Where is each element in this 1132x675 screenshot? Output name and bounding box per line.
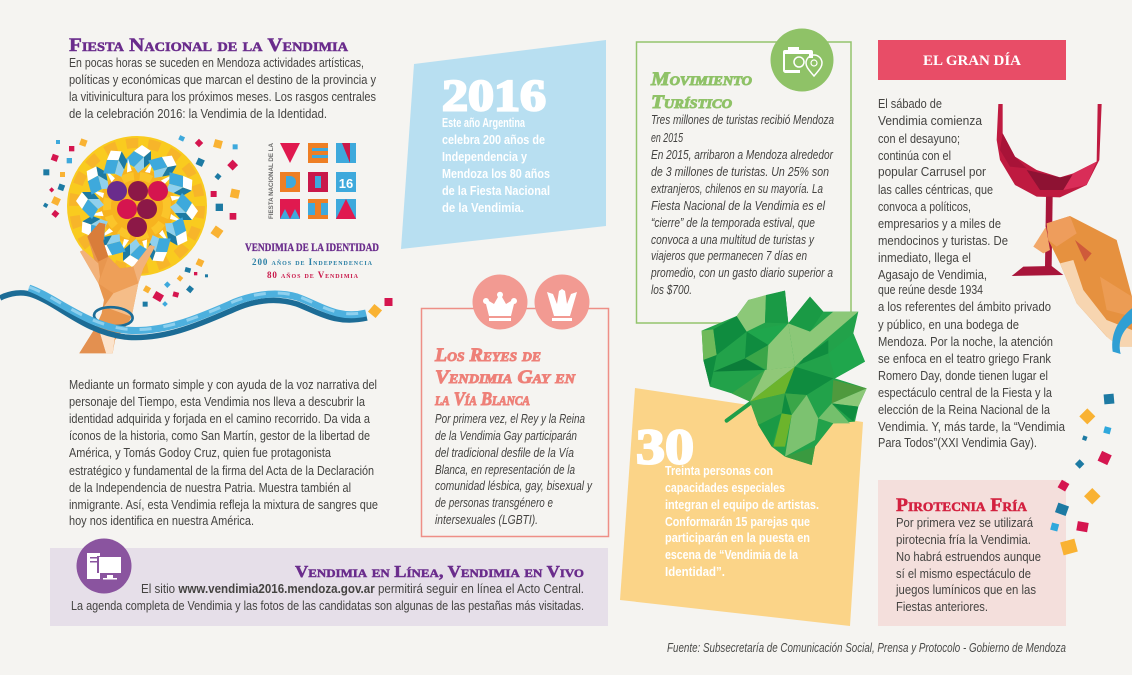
text: 30 body: Conformarán 15 parejas que bbox=[665, 515, 810, 529]
panel: Pirotecnia Fría bbox=[878, 480, 1066, 626]
panel: Los Reyes bbox=[422, 274, 608, 536]
text: Movimiento body: “cierre” de la temporada estival, que bbox=[651, 216, 815, 230]
logo caption: 200 años de Independencia bbox=[252, 257, 373, 267]
text: Los Reyes body bbox=[435, 412, 593, 527]
text: 30 body: Identidad”. bbox=[665, 565, 725, 579]
panel: Movimiento Turístico bbox=[636, 28, 851, 323]
icon: wine glass bbox=[997, 104, 1102, 276]
text: Pirotecnia body: pirotecnia fría la Vendimia. bbox=[896, 533, 1031, 547]
number: 2016: 2016 bbox=[442, 71, 546, 120]
text: Vendimia en Línea body: La agenda completa de Vendimia y las fotos de las candidatas son algunas de las pestañas más visitadas. bbox=[71, 599, 584, 613]
text: Movimiento body: en 2015 bbox=[651, 131, 683, 145]
text block: El Gran Día body bbox=[878, 97, 1065, 450]
text block: El Gran Día body: popular Carrusel por bbox=[878, 165, 986, 179]
text: 2016 body: Este año Argentina bbox=[442, 116, 526, 130]
heading: Movimiento Turístico: Movimiento bbox=[650, 69, 753, 90]
heading: Fiesta Nacional de la Vendimia: Fiesta Nacional de la Vendimia bbox=[69, 35, 349, 56]
text: Los Reyes body: de la Vendimia Gay participarán bbox=[435, 429, 577, 443]
text block: intro: En pocas horas se suceden en Mendoza actividades artísticas, bbox=[69, 56, 364, 70]
text block: El Gran Día body: El sábado de bbox=[878, 97, 942, 111]
text block: Mediante un formato bbox=[69, 378, 378, 528]
illustration: green leaf bbox=[702, 291, 867, 465]
text: 2016 body: de la Vendimia. bbox=[442, 201, 524, 215]
icon: hand holding mandala bbox=[79, 223, 155, 353]
text block: El Gran Día body: mendocinos y turistas. De bbox=[878, 234, 1008, 248]
text: Los Reyes body: del tradicional desfile de la Vía bbox=[435, 446, 574, 460]
text block: El Gran Día body: espectáculo central de la Fiesta y la bbox=[878, 386, 1052, 400]
text block: Mediante un formato: inmigrante. Así, esta Vendimia refleja la mixtura de sangres que bbox=[69, 498, 378, 512]
text block: El Gran Día body: Vendimia. Y, más tarde, la “Vendimia bbox=[878, 420, 1065, 434]
text: Movimiento body: promedio, con un gasto diario superior a bbox=[650, 266, 833, 280]
text block: intro: de la celebración 2016: la Vendimia de la Identidad. bbox=[69, 107, 327, 121]
text: 2016 body: de la Fiesta Nacional bbox=[442, 184, 550, 198]
text block: intro: políticas y económicas que marcan el destino de la provincia y bbox=[69, 73, 377, 87]
text block: El Gran Día body: inmediato, llega el bbox=[878, 251, 971, 265]
text: 30 body bbox=[665, 464, 819, 579]
text block: El Gran Día body: continúa con el bbox=[878, 149, 951, 163]
heading: Pirotecnia Fría: Pirotecnia Fría bbox=[896, 495, 1028, 516]
text block: El Gran Día body: con el desayuno; bbox=[878, 132, 960, 146]
text: Movimiento body: Fiesta Nacional de la Vendimia es el bbox=[651, 199, 826, 213]
text: 30 body: escena de “Vendimia de la bbox=[665, 548, 799, 562]
text: Movimiento body: convoca a una multitud de turistas y bbox=[651, 233, 815, 247]
panel: 30 bbox=[620, 388, 863, 626]
heading: Vendimia en Línea, Vendimia en Vivo: Vendimia en Línea, Vendimia en Vivo bbox=[295, 562, 584, 581]
text block: El Gran Día body: y público, en una bodega de bbox=[878, 318, 1019, 332]
text: 30 body: capacidades especiales bbox=[665, 481, 785, 495]
text: 2016 body: Mendoza los 80 años bbox=[442, 167, 550, 181]
text: 2016 body bbox=[442, 116, 550, 215]
text: Los Reyes body: intersexuales (LGBTI). bbox=[435, 513, 538, 527]
text block: Mediante un formato: identidad adquirida y forjada en el camino recorrido. Da vida a bbox=[69, 412, 370, 426]
heading: Los Reyes de Vendimia Gay en la Vía Blanca: Los Reyes de bbox=[434, 345, 541, 366]
text: Movimiento body: viajeros que permanecen 7 días en bbox=[651, 249, 807, 263]
icon: camera with location pin bbox=[770, 28, 834, 92]
icon: queen crown bbox=[534, 274, 590, 330]
text block: intro bbox=[69, 56, 377, 121]
heading: Movimiento Turístico: Turístico bbox=[651, 92, 733, 113]
text block: El Gran Día body: empresarios y a miles de bbox=[878, 217, 1001, 231]
logo caption: 80 años de Vendimia bbox=[267, 270, 359, 280]
text block: Mediante un formato: América, y Tomás Godoy Cruz, quien fue protagonista bbox=[69, 446, 331, 460]
illustration: Vendimia logo with hand, mandala and ribbon bbox=[0, 135, 392, 353]
text: Movimiento body: los $700. bbox=[651, 283, 692, 297]
text: Los Reyes body: comunidad lésbica, gay, bisexual y bbox=[435, 479, 593, 493]
text block: El Gran Día body: elección de la Reina Nacional de la bbox=[878, 403, 1050, 417]
text block: El Gran Día body: Vendimia comienza bbox=[878, 114, 982, 128]
text: Los Reyes body: Blanca, en representación de la bbox=[435, 463, 575, 477]
text: Movimiento body: En 2015, arribaron a Mendoza alrededor bbox=[651, 148, 834, 162]
bracelet bbox=[1112, 308, 1132, 354]
text block: Mediante un formato: personaje del Tiempo, esta Vendimia nos lleva a descubrir la bbox=[69, 395, 365, 409]
text block: El Gran Día body: Agasajo de Vendimia, bbox=[878, 268, 987, 282]
text: 30 body: participarán en la puesta en bbox=[665, 531, 810, 545]
text: 2016 body: celebra 200 años de bbox=[442, 133, 545, 147]
logo caption: VENDIMIA DE LA IDENTIDAD bbox=[245, 240, 379, 254]
text: Pirotecnia body: No habrá estruendos aunque bbox=[896, 550, 1041, 564]
icon: hand holding glass bbox=[1033, 216, 1132, 347]
confetti: around mandala bbox=[43, 135, 240, 307]
text: Movimiento body: extranjeros, chilenos en su mayoría. La bbox=[651, 182, 823, 196]
banner: El Gran Día: EL GRAN DÍA bbox=[923, 52, 1021, 69]
text block: Mediante un formato: hoy nos identifica en nuestra América. bbox=[69, 514, 254, 528]
text block: Mediante un formato: estratégico y fundamental de la firma del Acta de la Declaración bbox=[69, 464, 374, 478]
text: Pirotecnia body: sí el mismo espectáculo de bbox=[896, 567, 1031, 581]
text block: intro: la vitivinicultura para los próximos meses. Los rasgos centrales bbox=[69, 90, 376, 104]
text block: El Gran Día body: convoca a políticos, bbox=[878, 200, 971, 214]
icon: king crown bbox=[472, 274, 528, 330]
text: Pirotecnia body bbox=[895, 516, 1041, 614]
banner: El Gran Día bbox=[878, 40, 1066, 80]
heading: Movimiento Turístico bbox=[650, 69, 753, 113]
logo: VEN DI16 MIA squares: FIESTA NACIONAL DE LA bbox=[268, 143, 275, 219]
text: Los Reyes body: Por primera vez, el Rey y la Reina bbox=[435, 412, 585, 426]
heading: Los Reyes de Vendimia Gay en la Vía Blanca bbox=[434, 345, 576, 410]
text: Pirotecnia body: Fiestas anteriores. bbox=[896, 600, 988, 614]
illustration: wine glass and hand bbox=[997, 104, 1132, 354]
text: Pirotecnia body: juegos lumínicos que en las bbox=[895, 583, 1036, 597]
panel: Vendimia en Línea bbox=[50, 538, 608, 626]
icon: mandala bbox=[67, 136, 207, 276]
logo: VEN DI16 MIA squares bbox=[268, 143, 356, 219]
heading: Los Reyes de Vendimia Gay en la Vía Blanca: la Vía Blanca bbox=[434, 389, 530, 410]
logo: VEN DI16 MIA squares: 16 bbox=[339, 176, 353, 191]
logo caption bbox=[245, 240, 379, 280]
icon: grapes bbox=[107, 181, 168, 237]
text block: El Gran Día body: a los referentes del ámbito privado bbox=[878, 300, 1051, 314]
confetti: ribbon end bbox=[368, 298, 392, 318]
ribbon bbox=[0, 287, 367, 338]
text: Movimiento body bbox=[650, 113, 834, 297]
text: Movimiento body: de 3 millones de turistas. Un 25% son bbox=[651, 165, 829, 179]
text: Los Reyes body: de personas transgénero e bbox=[435, 496, 553, 510]
icon: computer bbox=[76, 538, 132, 594]
text: 30 body: Treinta personas con bbox=[665, 464, 773, 478]
text block: El Gran Día body: se enfoca en el teatro griego Frank bbox=[878, 352, 1052, 366]
text block: El Gran Día body: Mendoza. Por la noche, la atención bbox=[878, 335, 1053, 349]
text: 30 body: integran el equipo de artistas. bbox=[665, 498, 819, 512]
text: Vendimia en Línea body: El sitio www.vendimia2016.mendoza.gov.ar permitirá seguir en línea el Acto Central. bbox=[141, 582, 584, 596]
text block: El Gran Día body: Romero Day, donde tienen lugar el bbox=[878, 369, 1048, 383]
text block: Mediante un formato: íconos de la historia, como San Martín, gestor de la libertad de bbox=[69, 429, 370, 443]
heading: Los Reyes de Vendimia Gay en la Vía Blanca: Vendimia Gay en bbox=[435, 367, 576, 388]
text block: El Gran Día body: que reúne desde 1934 bbox=[878, 283, 983, 297]
confetti: right side bbox=[1050, 394, 1114, 555]
panel: 2016 bbox=[401, 40, 606, 249]
text: Pirotecnia body: Por primera vez se utilizará bbox=[896, 516, 1033, 530]
text block: El Gran Día body: las calles céntricas, que bbox=[878, 183, 993, 197]
text: 2016 body: Independencia y bbox=[442, 150, 527, 164]
number: 30: 30 bbox=[636, 418, 694, 474]
text: Movimiento body: Tres millones de turistas recibió Mendoza bbox=[651, 113, 834, 127]
bracelet ring bbox=[93, 306, 133, 328]
text block: Mediante un formato: de la Independencia de nuestra Patria. Muestra también al bbox=[69, 481, 351, 495]
text: Vendimia en Línea body bbox=[71, 582, 584, 613]
text block: Mediante un formato: Mediante un formato simple y con ayuda de la voz narrativa del bbox=[69, 378, 377, 392]
text block: El Gran Día body: Para Todos”(XXI Vendimia Gay). bbox=[878, 436, 1037, 450]
